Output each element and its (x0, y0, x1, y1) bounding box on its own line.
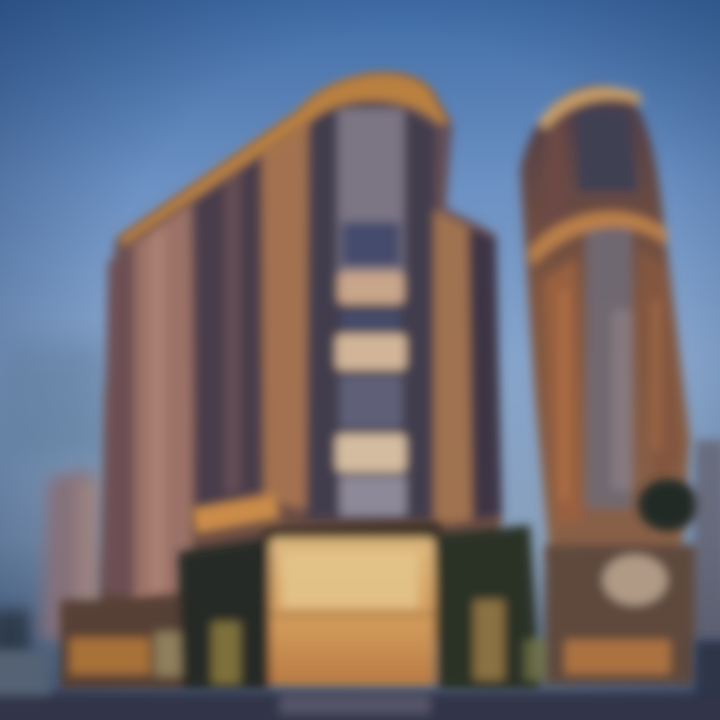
roofline glow (118, 73, 450, 246)
tower centre window strip (586, 228, 632, 508)
main building (100, 75, 502, 640)
tree highlight (212, 622, 240, 684)
right wing (434, 210, 472, 525)
podium roof (262, 522, 445, 545)
tower dark glazing (575, 107, 638, 192)
podium base (60, 600, 270, 690)
dark trees (178, 538, 268, 690)
tower warm columns (544, 258, 582, 525)
tower upper columns (542, 115, 568, 225)
building body (100, 75, 502, 640)
tower gold band (528, 212, 668, 266)
lobby upper panel (282, 552, 418, 608)
low building left (0, 468, 110, 700)
central glazing (306, 102, 436, 520)
podium warm light left (70, 638, 150, 674)
canopy glow (192, 494, 280, 534)
right tower (520, 85, 690, 570)
right podium (545, 545, 695, 685)
podium and lobby (60, 440, 720, 690)
palm highlight (474, 600, 504, 680)
tower crown glow (538, 87, 642, 130)
central bright window bands (338, 272, 404, 304)
street foreground (0, 640, 720, 720)
lobby (270, 538, 435, 686)
left wing columns (102, 243, 135, 600)
palms (434, 525, 540, 690)
right tree (638, 479, 698, 531)
tower body (520, 85, 690, 570)
central window column (338, 108, 404, 273)
